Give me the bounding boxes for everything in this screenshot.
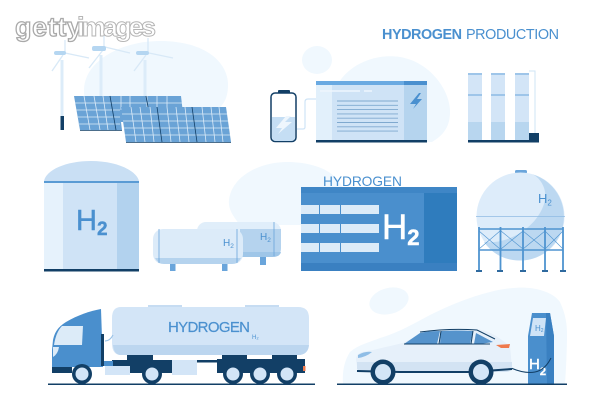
watermark: gettyimages [15,12,156,42]
icon: battery [271,90,296,142]
solar panels: back row [74,96,184,130]
panel: hydrogen truck: HYDROGEN [168,319,250,336]
hydrogen pump: H [529,356,540,373]
title: PRODUCTION [466,27,559,43]
background blobs [84,41,567,384]
panel: hydrogen truck [48,305,315,385]
chassis [112,355,305,373]
panel: hydrogen truck: H₂ [252,335,259,341]
hydrogen pump: H [535,324,541,333]
panel: horizontal H2 tanks: H [260,232,267,243]
panel: large H2 storage tank: H [76,205,97,237]
panel: horizontal H2 tanks: 2 [230,243,234,250]
panel: spherical tank [476,170,566,272]
panel: horizontal H2 tanks: H [223,238,230,249]
hydrogen pump [511,313,554,384]
panel: spherical tank: H [538,191,547,206]
truck cab [52,309,103,367]
connector cable [297,99,316,129]
hydrogen pump: 2 [540,366,546,378]
panel: electrolyser box [316,81,427,142]
panel: hydrogen building: HYDROGEN [323,174,402,189]
panel: spherical tank: 2 [547,198,552,208]
panel: hydrogen building: H [382,208,407,247]
watermark: gettyimages: images [77,12,156,42]
icon: lightning bolt [410,93,422,109]
hydrogen pump: 2 [541,328,544,334]
wheels [72,364,297,384]
panel: hydrogen building: 2 [407,225,420,250]
title: HYDROGEN [382,27,462,43]
car [356,329,512,372]
icon: wind turbines [52,36,173,130]
panel: large H2 storage tank: 2 [97,219,108,240]
panel: horizontal H2 tanks [153,222,281,271]
panel: gas columns [468,71,539,142]
panel: hydrogen building [301,174,457,271]
watermark: gettyimages: getty [15,12,82,42]
panel: hydrogen car and pump [337,313,567,385]
solar panels: front row [121,107,231,142]
panel: large H2 storage tank [44,161,139,272]
panel: horizontal H2 tanks: 2 [267,237,271,244]
